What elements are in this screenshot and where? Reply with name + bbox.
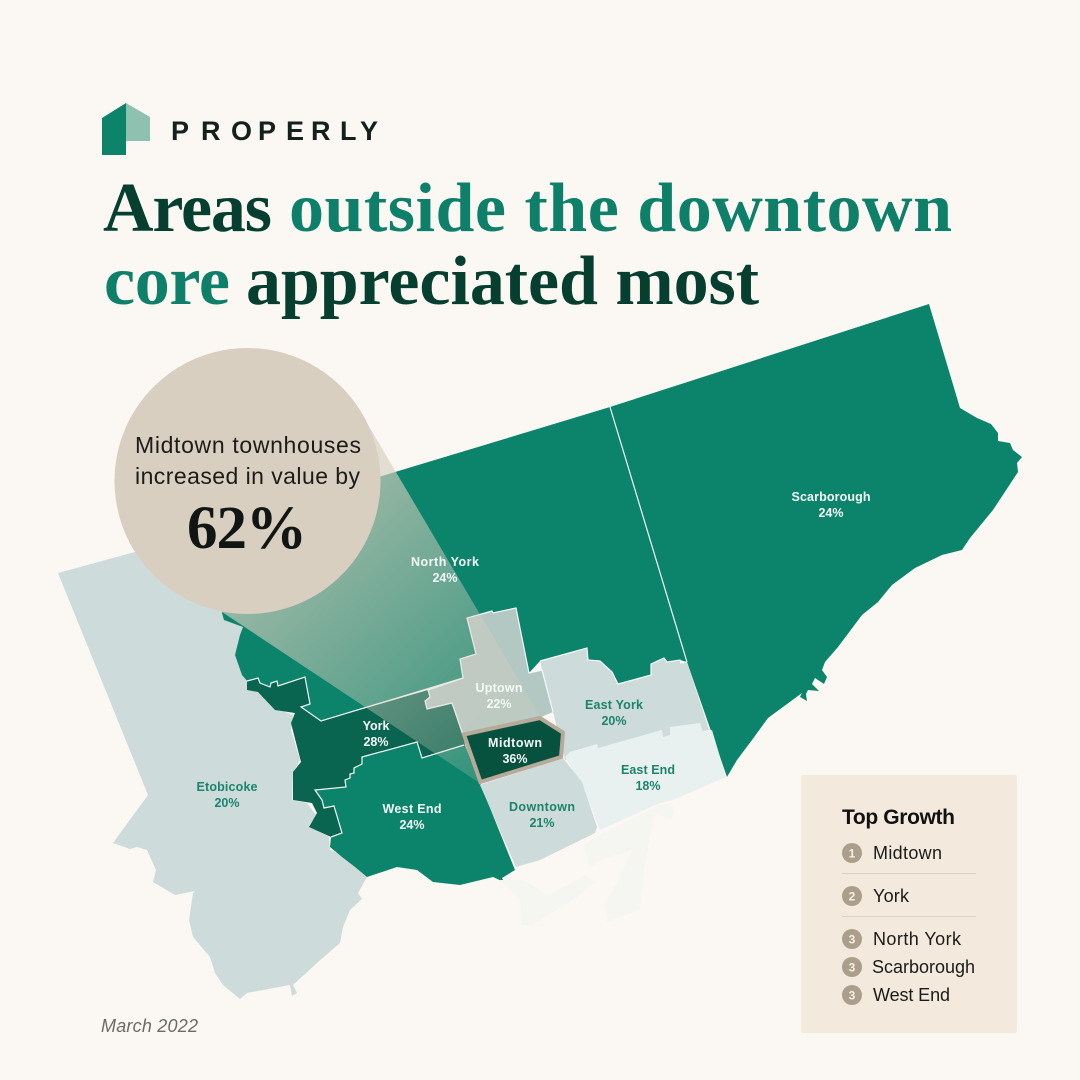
label: Uptown: Uptown — [476, 681, 522, 695]
region: Scarborough — [610, 304, 1022, 777]
label: Downtown: Downtown — [509, 800, 575, 814]
title: appreciated most — [246, 243, 759, 320]
map of Toronto districts — [58, 304, 1022, 999]
callout circle: Midtown townhouses — [135, 432, 361, 458]
label: East End: 18% — [635, 779, 661, 793]
label: Midtown: Midtown — [488, 736, 542, 750]
label: Downtown: 21% — [529, 816, 555, 830]
label: Midtown: 36% — [502, 752, 528, 766]
legend item: North York: North York — [873, 929, 962, 949]
region: York — [247, 677, 465, 837]
legend item: York: York — [873, 886, 910, 906]
legend item: West End: 3 — [849, 988, 856, 1002]
label: North York: 24% — [432, 571, 458, 585]
date: March 2022 — [101, 1016, 198, 1036]
label: East York: 20% — [601, 714, 627, 728]
callout circle: increased in value by — [135, 463, 360, 489]
label: West End: 24% — [399, 818, 425, 832]
legend item: York — [842, 886, 910, 906]
callout circle: 62% — [187, 495, 307, 562]
region: Downtown — [480, 758, 597, 867]
region: North York — [222, 407, 687, 721]
label: East End: East End — [621, 763, 675, 777]
title: Areas — [103, 170, 272, 247]
region: Etobicoke — [58, 522, 367, 999]
region: East End — [565, 723, 726, 830]
legend item: York: 2 — [849, 890, 856, 904]
legend item: Midtown: Midtown — [873, 843, 942, 863]
title — [103, 170, 952, 320]
callout circle — [114, 348, 380, 614]
callout beam — [222, 423, 540, 782]
region: Midtown — [464, 718, 563, 782]
label: North York: North York — [411, 555, 479, 569]
label: Scarborough: Scarborough — [792, 490, 870, 504]
legend item: West End: West End — [873, 985, 950, 1005]
lake islands — [500, 803, 675, 925]
legend panel: Top Growth: Top Growth — [842, 806, 955, 829]
legend panel: Top Growth — [801, 775, 1017, 1033]
label: East York: East York — [585, 698, 643, 712]
district boundary lines — [247, 407, 687, 837]
title: core — [104, 243, 230, 320]
legend item: Scarborough: 3 — [849, 960, 856, 974]
label: Etobicoke: Etobicoke — [196, 780, 258, 794]
legend item: Midtown — [842, 843, 942, 863]
label: York: 28% — [363, 735, 389, 749]
label: Etobicoke: 20% — [214, 796, 240, 810]
logo — [102, 103, 378, 155]
label: Scarborough: 24% — [818, 506, 844, 520]
title: outside the downtown — [289, 170, 952, 247]
legend item: Midtown: 1 — [849, 846, 856, 860]
legend item: Scarborough: Scarborough — [872, 957, 975, 977]
region: Uptown — [425, 608, 553, 737]
legend item: North York: 3 — [849, 932, 856, 946]
region: East York — [540, 648, 709, 760]
label: West End: West End — [382, 802, 442, 816]
label: Uptown: 22% — [486, 697, 512, 711]
region: West End — [315, 742, 515, 885]
logo: PROPERLY — [171, 116, 378, 146]
label: York: York — [363, 719, 389, 733]
